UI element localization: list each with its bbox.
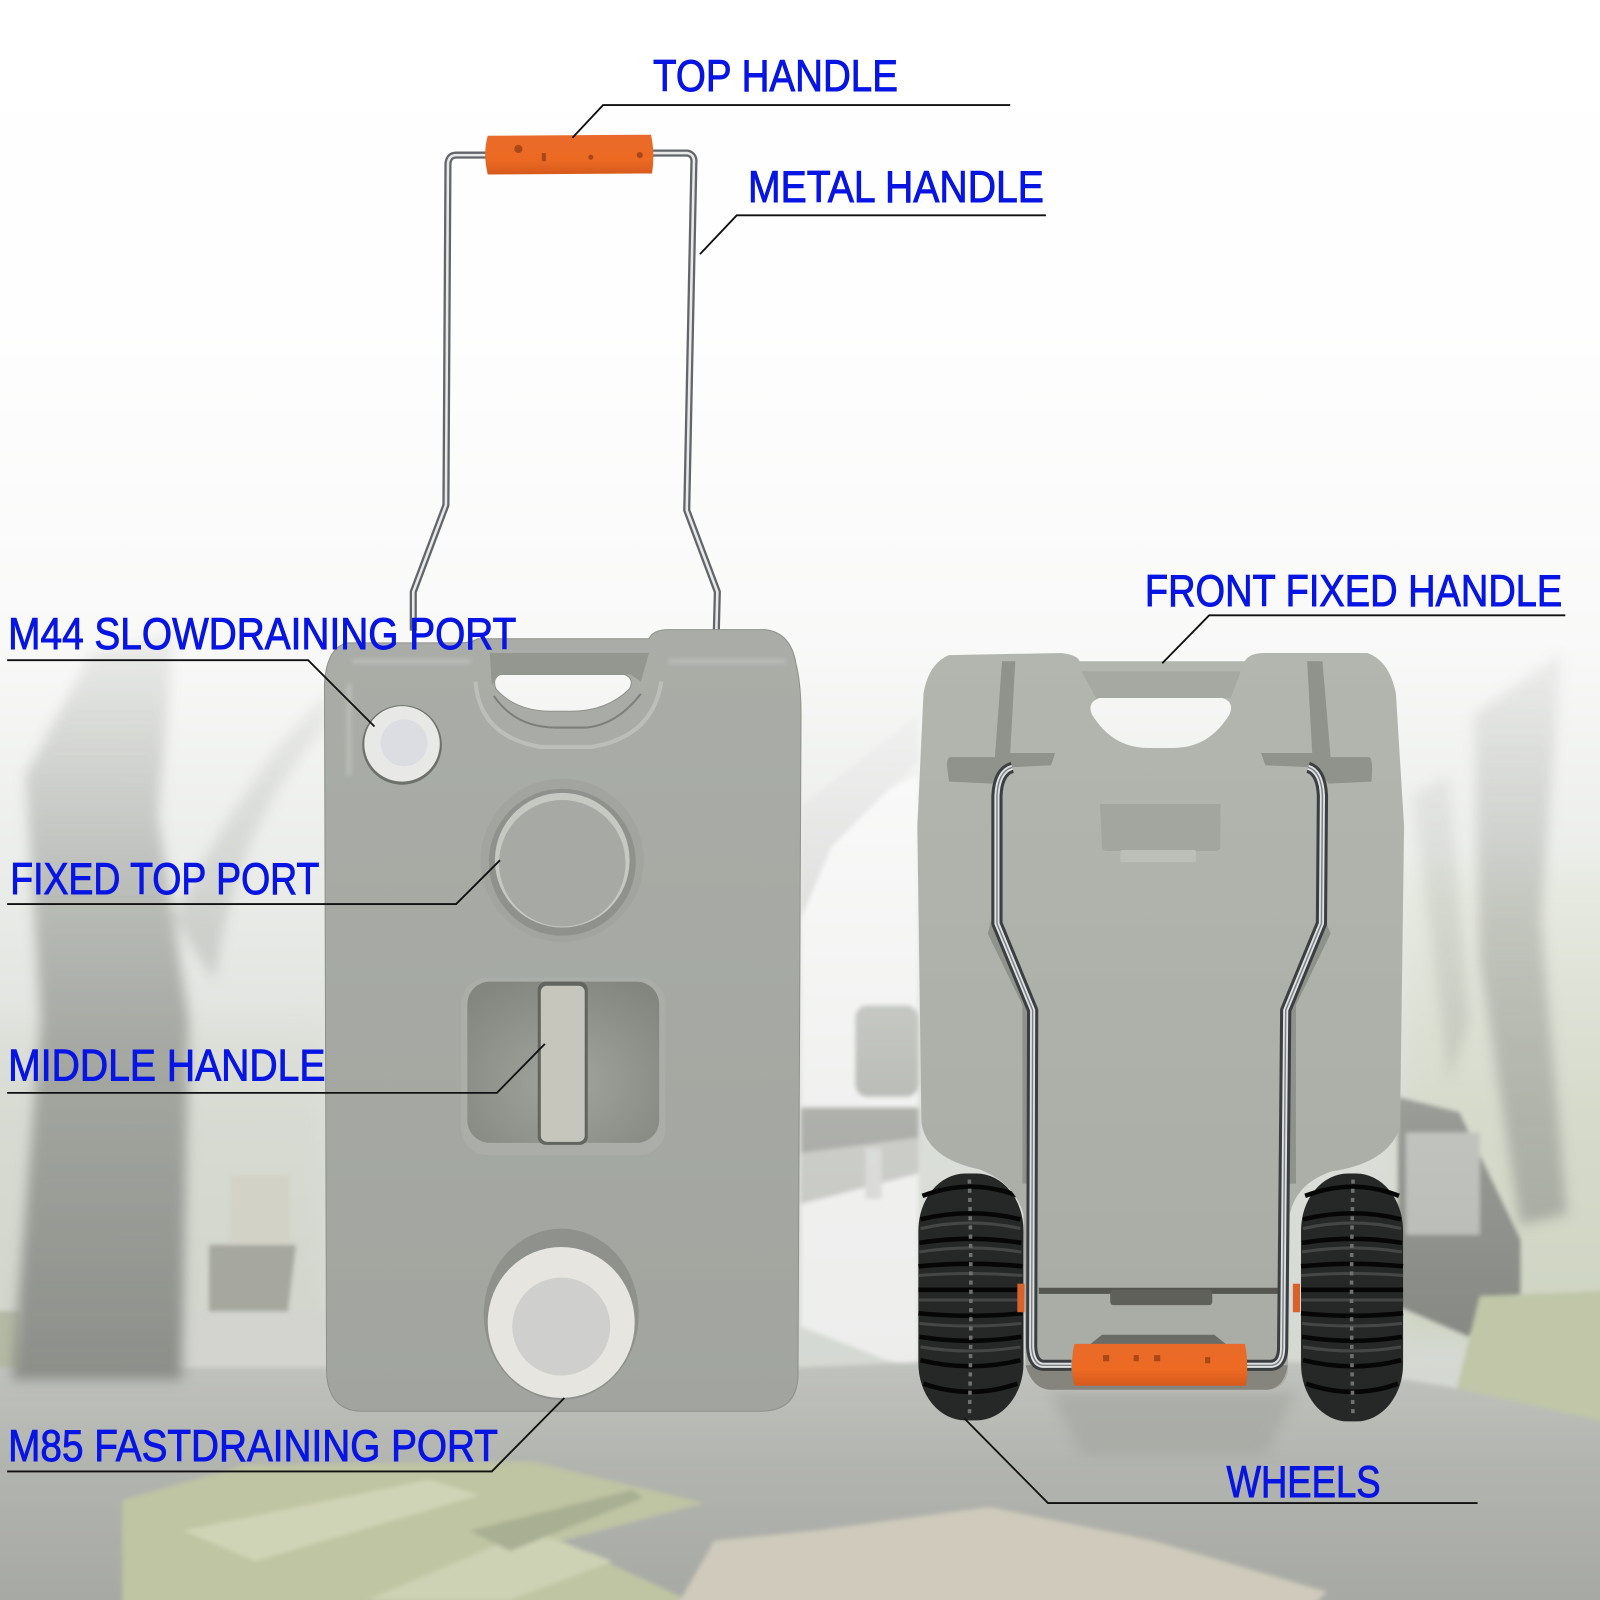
callout: metal handle <box>700 161 1046 254</box>
rail channels <box>988 918 1331 1184</box>
fixed label pocket <box>1100 804 1220 851</box>
callout: front fixed handle <box>1145 565 1565 663</box>
RV <box>801 714 1520 1372</box>
axle pins <box>1017 1284 1300 1312</box>
callout: middle handle <box>7 1040 545 1093</box>
callout: m44 slowdraining port <box>7 608 516 727</box>
callout: m44 slowdraining port: M44 SLOWDRAINING PORT <box>8 608 516 659</box>
callout: top handle <box>572 50 1010 138</box>
callout: m85 fastdraining port: M85 FASTDRAINING PORT <box>8 1420 498 1471</box>
left wheel <box>918 1173 1023 1420</box>
tank body <box>917 653 1404 1390</box>
right wheel <box>1301 1173 1403 1421</box>
callout: top handle: TOP HANDLE <box>653 50 898 101</box>
bottom step detail <box>1026 1288 1288 1390</box>
right tank with wheels <box>917 653 1404 1421</box>
middle handle bar <box>538 982 588 1145</box>
chair <box>209 1176 296 1311</box>
hinge channels <box>947 661 1372 784</box>
callout: m85 fastdraining port <box>7 1398 564 1471</box>
tree trunks <box>12 633 1566 1380</box>
road and grass <box>0 1291 1600 1600</box>
front fixed handle recess <box>1082 671 1241 698</box>
shoulder highlights <box>349 661 786 776</box>
m85 cap <box>484 1229 639 1400</box>
metal folding rails <box>997 767 1322 1365</box>
callout: metal handle: METAL HANDLE <box>748 161 1044 212</box>
tank body <box>324 630 801 1411</box>
tank ground shadows <box>1051 1393 1296 1454</box>
top handle grip <box>485 135 653 174</box>
handle recess <box>476 653 661 747</box>
middle handle recess <box>461 978 665 1155</box>
bottom orange grip <box>1072 1344 1247 1386</box>
metal handle <box>413 153 717 631</box>
callout: wheels <box>964 1418 1478 1507</box>
m44 cap <box>362 705 442 785</box>
callout: wheels: WHEELS <box>1227 1456 1381 1507</box>
callout: middle handle: MIDDLE HANDLE <box>8 1040 326 1091</box>
callout: fixed top port: FIXED TOP PORT <box>10 853 319 904</box>
fixed top port <box>481 779 644 942</box>
left tank with pull handle <box>324 135 801 1411</box>
